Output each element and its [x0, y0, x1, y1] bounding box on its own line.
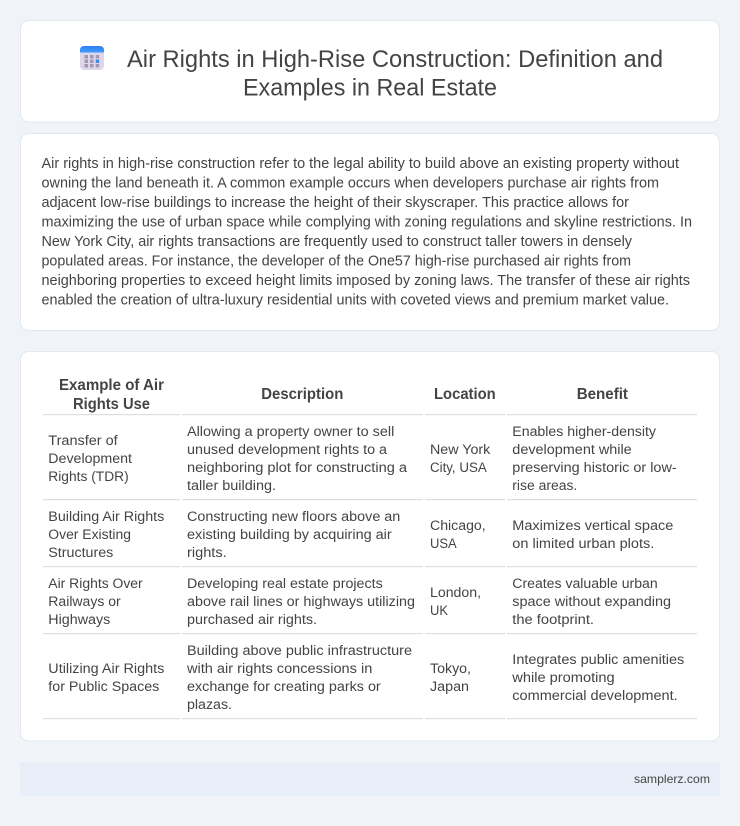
table row: transfer of development rights — [48, 424, 677, 494]
table row: transfer of development rights: Allowing a property owner to sell — [187, 424, 394, 440]
table row: public spaces: while promoting — [511, 670, 615, 686]
table row: building over existing structures: on limited urban plots. — [512, 536, 654, 552]
table row: railways or highways: Creates valuable urban — [512, 576, 658, 592]
table row: public spaces: Tokyo, — [430, 661, 471, 677]
table row: transfer of development rights: Enables higher-density — [512, 424, 657, 440]
table row: public spaces: plazas. — [187, 697, 232, 713]
table row: building over existing structures: Constructing new floors above an — [187, 509, 400, 525]
table row: public spaces: for Public Spaces — [48, 679, 159, 695]
table row: building over existing structures: Chicago, — [430, 518, 486, 534]
table row: public spaces: with air rights concessions in — [186, 661, 372, 677]
table row: transfer of development rights: Development — [48, 451, 132, 467]
table row: railways or highways: the footprint. — [512, 612, 594, 628]
table row: railways or highways: Highways — [48, 612, 110, 628]
table header: Example of Air — [59, 377, 164, 394]
table row: transfer of development rights: neighboring plot for constructing a — [187, 460, 407, 476]
table header: Benefit — [577, 386, 628, 403]
table rules — [43, 414, 697, 719]
title: Examples in Real Estate — [243, 74, 497, 102]
table row: railways or highways: space without expanding — [512, 594, 671, 610]
table row: railways or highways: above rail lines or highways utilizing — [187, 594, 415, 610]
table row: building over existing structures: rights. — [187, 545, 227, 561]
table header — [59, 377, 628, 413]
table row: transfer of development rights: City, USA — [430, 460, 487, 476]
text block: paragraph: Air rights in high-rise construction refer to the legal ability to build above an existing property without — [42, 156, 679, 172]
footer text: samplerz.com — [634, 772, 710, 786]
table row: public spaces: Japan — [430, 679, 469, 695]
text block: paragraph: New York City, air rights transactions are frequently used to construct taller towers in densely — [42, 234, 633, 250]
table row: railways or highways: UK — [430, 603, 448, 619]
table row: building over existing structures: Building Air Rights — [48, 509, 164, 525]
table row: building over existing structures: Maximizes vertical space — [512, 518, 673, 534]
text block: paragraph: populated areas. For instance, the developer of the One57 high-rise purchased air rights from — [42, 253, 631, 269]
table row: railways or highways: purchased air rights. — [187, 612, 317, 628]
table header: Location — [434, 386, 496, 403]
table row: public spaces: exchange for creating parks or — [187, 679, 381, 695]
table row: transfer of development rights: preserving historic or low- — [512, 460, 677, 476]
text block: paragraph: neighboring properties to exceed height limits imposed by zoning laws. The transfer of these air rights — [42, 273, 690, 289]
panel: table card — [20, 352, 720, 741]
table row: building over existing structures: Structures — [48, 545, 113, 561]
text block: paragraph: maximizing the use of urban space while complying with zoning regulations and skyline restrictions. In — [42, 214, 692, 230]
table row: transfer of development rights: rise areas. — [512, 478, 577, 494]
table row: transfer of development rights: development while — [512, 442, 632, 458]
table row: transfer of development rights: Rights (TDR) — [48, 469, 129, 485]
table row: public spaces: Utilizing Air Rights — [48, 661, 164, 677]
table row: public spaces: Integrates public amenities — [512, 652, 684, 668]
table row: building over existing structures: USA — [430, 536, 457, 552]
title — [127, 46, 663, 102]
text block: paragraph: owning the land beneath it. A common example occurs when developers purchase air rights from — [42, 176, 659, 192]
text block: paragraph: adjacent low-rise buildings to increase the height of their skyscraper. This practice allows for — [42, 195, 629, 211]
panel: header card — [20, 20, 720, 122]
table header: Description — [261, 386, 343, 403]
table row: building over existing structures: Over Existing — [48, 527, 131, 543]
table row: public spaces: Building above public infrastructure — [187, 643, 412, 659]
table row: transfer of development rights: unused development rights to a — [187, 442, 387, 458]
table row: transfer of development rights: New York — [430, 442, 491, 458]
table row: public spaces — [48, 643, 684, 713]
table row: railways or highways: Air Rights Over — [48, 576, 143, 592]
table row: public spaces: commercial development. — [512, 688, 678, 704]
table row: railways or highways: London, — [430, 585, 481, 601]
icon: calendar — [80, 46, 104, 70]
table row: transfer of development rights: Transfer of — [48, 433, 118, 449]
footer bar — [20, 762, 720, 796]
panel: intro paragraph — [20, 134, 720, 330]
table row: railways or highways: Railways or — [48, 594, 121, 610]
table header: Rights Use — [73, 396, 150, 413]
table row: transfer of development rights: taller building. — [187, 478, 276, 494]
table row: railways or highways: Developing real estate projects — [187, 576, 383, 592]
table row: building over existing structures: existing building by acquiring air — [187, 527, 392, 543]
text block: paragraph — [42, 156, 692, 308]
table row: building over existing structures — [48, 509, 673, 561]
text block: paragraph: enabled the creation of ultra-luxury residential units with coveted views and premium market value. — [42, 292, 669, 308]
title: Air Rights in High-Rise Construction: Definition and — [127, 46, 663, 73]
table row: railways or highways — [48, 576, 671, 628]
